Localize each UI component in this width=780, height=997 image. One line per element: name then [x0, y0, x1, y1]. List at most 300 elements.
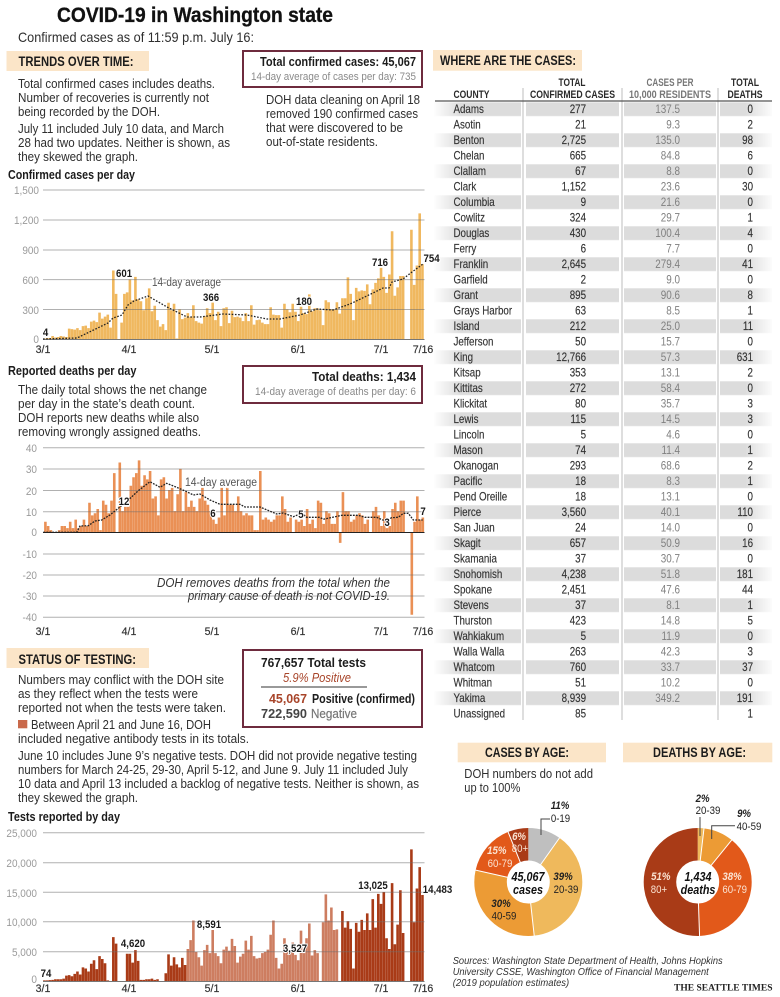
row: Stevens: Stevens [454, 599, 489, 612]
row: Jefferson: Jefferson [454, 336, 494, 349]
panel: deaths by age heading [623, 743, 772, 762]
row: Okanogan: Okanogan [454, 460, 499, 473]
row: Clark: 1,152 [562, 181, 586, 194]
row: Wahkiakum: Wahkiakum [454, 630, 504, 643]
x axis labels: 7/1 [374, 626, 388, 638]
row: Kitsap [454, 367, 753, 380]
bars: tests, standard days [44, 849, 422, 981]
row: Mason: 1 [748, 444, 753, 457]
text block: deaths note [18, 383, 207, 439]
row: Spokane: 47.6 [661, 584, 680, 597]
row: Skagit [454, 537, 753, 550]
row: Franklin [454, 258, 753, 271]
row: Lincoln: 5 [581, 429, 586, 442]
callout: test totals: 45,067 [269, 691, 307, 706]
row: Snohomish [454, 568, 753, 581]
wedge labels: 60-79 [722, 883, 747, 896]
row: Adams: 137.5 [655, 103, 680, 116]
value labels: 12 [119, 495, 129, 508]
text block: testing notes: June 10 includes June 9’s negative tests. DOH did not provide negative testing [18, 749, 417, 763]
row: Asotin: 21 [575, 119, 586, 132]
x axis labels: 3/1 [36, 344, 50, 356]
row: Kitsap: 2 [748, 367, 753, 380]
value labels: 14,483 [423, 883, 452, 896]
wedge labels: 40-59 [737, 820, 761, 833]
x axis labels: 3/1 [36, 626, 50, 638]
x axis labels [36, 344, 433, 356]
text block: sources: Sources: Washington State Department of Health, Johns Hopkins [453, 955, 723, 967]
row: Klickitat: Klickitat [454, 398, 487, 411]
callout: total confirmed cases [243, 51, 422, 87]
row: Cowlitz: Cowlitz [454, 212, 485, 225]
row: Ferry: 6 [581, 243, 586, 256]
x axis labels: 6/1 [291, 626, 305, 638]
row: Yakima [454, 692, 753, 705]
row: Lincoln [454, 429, 753, 442]
value labels: 3 [384, 516, 390, 529]
text block: trends notes: being recorded by the DOH. [18, 105, 160, 119]
text block: testing notes: included negative antibody tests in its totals. [18, 732, 249, 746]
wedge labels: 20-39 [554, 883, 578, 896]
row: Walla Walla: Walla Walla [454, 646, 504, 659]
row: Yakima: Yakima [454, 692, 485, 705]
row: Grays Harbor [454, 305, 753, 318]
text block: data cleaning note: out-of-state residents. [266, 135, 378, 149]
wedge labels: 38% [722, 870, 742, 883]
chart: reported deaths per day [8, 364, 433, 638]
panel: where are the cases heading [433, 50, 582, 71]
callout: test totals: 722,590 [261, 706, 307, 721]
panel: cases by age heading: CASES BY AGE: [485, 745, 569, 760]
text block: testing notes: Between April 21 and June 16, DOH [31, 718, 211, 732]
row: Wahkiakum: 0 [748, 630, 753, 643]
row: Skamania [454, 553, 753, 566]
donut center: 45,067 [511, 869, 546, 884]
row: Whitman [454, 677, 753, 690]
row: Clark [454, 181, 753, 194]
text block: sources: (2019 population estimates) [453, 977, 569, 989]
value labels [119, 477, 426, 529]
row: Spokane: 2,451 [562, 584, 586, 597]
value labels: 7 [420, 505, 426, 518]
text block: deaths note: DOH reports new deaths while also [18, 411, 199, 425]
value labels: 754 [423, 252, 440, 265]
table: cases by county [433, 77, 775, 721]
row: King: King [454, 351, 473, 364]
text block: data cleaning note: removed 190 confirmed cases [266, 107, 418, 121]
row: Whatcom: 33.7 [661, 661, 680, 674]
panel: testing heading: STATUS OF TESTING: [18, 652, 136, 667]
row: Okanogan: 293 [570, 460, 586, 473]
row: Stevens: 8.1 [666, 599, 680, 612]
chart: confirmed cases per day [8, 168, 440, 356]
callout: total confirmed cases: 14-day average of cases per day: 735 [251, 71, 416, 83]
wedge labels: 60-79 [488, 857, 512, 870]
row: Grant: 8 [748, 289, 753, 302]
row: Island: 212 [570, 320, 586, 333]
row: Clallam: 0 [748, 165, 753, 178]
row: Mason: 74 [575, 444, 586, 457]
row: Columbia: 9 [581, 196, 586, 209]
y axis labels: 900 [22, 244, 39, 257]
row: Whatcom: 37 [742, 661, 753, 674]
y axis labels [6, 827, 37, 986]
table header [454, 77, 762, 101]
text block: age note [464, 767, 593, 795]
text block: trends notes: 28 had two updates. Neither is shown, as [18, 136, 230, 150]
row: San Juan: 14.0 [661, 522, 680, 535]
row: Adams [454, 103, 753, 116]
row: Thurston: 5 [748, 615, 753, 628]
row: Pierce [454, 506, 753, 519]
row: Clark: 23.6 [661, 181, 680, 194]
y axis labels: 300 [22, 304, 39, 317]
donut center [511, 869, 546, 897]
text block: data cleaning note [266, 93, 420, 149]
callout: test totals: Positive (confirmed) [312, 692, 415, 706]
x axis labels: 4/1 [122, 344, 136, 356]
value labels: 14-day average [185, 477, 257, 489]
row: Lewis: 14.5 [661, 413, 680, 426]
row: Pierce: 3,560 [562, 506, 586, 519]
text block: testing notes: Numbers may conflict with the DOH site [18, 673, 224, 687]
row: Klickitat: 35.7 [661, 398, 680, 411]
row: Pierce: Pierce [454, 506, 481, 519]
y axis labels: 5,000 [12, 946, 37, 959]
row: Thurston: 423 [570, 615, 586, 628]
donut chart: cases by age [475, 799, 578, 936]
bars: daily deaths [45, 460, 423, 615]
row: Franklin: Franklin [454, 258, 488, 271]
row: Lewis: 115 [570, 413, 586, 426]
row: Ferry: 0 [748, 243, 753, 256]
callout: test totals: 5.9% Positive [283, 671, 351, 685]
row: Chelan: 6 [748, 150, 753, 163]
row: San Juan [454, 522, 753, 535]
row: Pacific: 8.3 [666, 475, 680, 488]
row: Lewis [454, 413, 753, 426]
row: San Juan: San Juan [454, 522, 495, 535]
row: Asotin: 2 [748, 119, 753, 132]
row: Klickitat: 80 [575, 398, 586, 411]
row: Douglas: 4 [748, 227, 753, 240]
panel: where are the cases heading: WHERE ARE THE CASES: [440, 53, 576, 68]
row: Stevens: 37 [575, 599, 586, 612]
x axis labels: 5/1 [205, 983, 219, 995]
chart heading: Confirmed cases per day [8, 168, 135, 182]
row: Whitman: 51 [575, 677, 586, 690]
y axis labels: -10 [23, 548, 37, 561]
panel: testing heading [6, 648, 149, 668]
wedge labels: 39% [553, 870, 573, 883]
wedge labels: 11% [551, 799, 570, 812]
row: Lincoln: Lincoln [454, 429, 484, 442]
row: King: 57.3 [661, 351, 680, 364]
x axis labels: 4/1 [122, 626, 136, 638]
donut center [681, 869, 716, 897]
row: Kitsap: 13.1 [661, 367, 680, 380]
row: Whitman: 0 [748, 677, 753, 690]
row: Walla Walla: 3 [748, 646, 753, 659]
title: COVID-19 in Washington state [57, 4, 333, 27]
row: Walla Walla [454, 646, 753, 659]
y axis labels: 20 [26, 485, 37, 498]
row: Columbia: 21.6 [661, 196, 680, 209]
row: Thurston: 14.8 [661, 615, 680, 628]
text block: data cleaning note: DOH data cleaning on April 18 [266, 93, 420, 107]
wedge labels: 2% [695, 792, 710, 805]
row: Benton [454, 134, 753, 147]
y axis labels: 0 [31, 973, 37, 986]
value labels: 601 [116, 267, 132, 280]
logo: The Seattle Times: THE SEATTLE TIMES [674, 984, 772, 994]
wedge labels: 51% [651, 870, 671, 883]
row: Columbia: Columbia [454, 196, 495, 209]
row: Skagit: 50.9 [661, 537, 680, 550]
row: Pacific: Pacific [454, 475, 483, 488]
y axis labels: 600 [22, 274, 39, 287]
line: 14-day average [43, 264, 423, 339]
callout: total deaths [243, 366, 422, 403]
text block: deaths note: removing wrongly assigned deaths. [18, 425, 201, 439]
value labels: 4,620 [121, 937, 145, 950]
row: Columbia: 0 [748, 196, 753, 209]
row: Whatcom: Whatcom [454, 661, 495, 674]
x axis labels: 4/1 [122, 983, 136, 995]
panel: cases by age heading [458, 743, 606, 762]
row: Grays Harbor: 8.5 [666, 305, 680, 318]
row: Benton: 98 [742, 134, 753, 147]
subtitle: Confirmed cases as of 11:59 p.m. July 16: [18, 29, 254, 45]
row: Pend Oreille: Pend Oreille [454, 491, 507, 504]
row: Thurston: Thurston [454, 615, 492, 628]
bars: tests including antibody [188, 894, 337, 981]
row: Mason: 11.4 [661, 444, 680, 457]
wedge labels: 80+ [512, 842, 528, 855]
row: Mason: Mason [454, 444, 483, 457]
row: Jefferson: 15.7 [661, 336, 680, 349]
table header: CONFIRMED CASES [530, 89, 615, 101]
text block: trends notes [18, 77, 230, 164]
row: Wahkiakum: 11.9 [661, 630, 680, 643]
x axis labels: 5/1 [205, 626, 219, 638]
y axis labels: 0 [31, 526, 37, 539]
row: Ferry [454, 243, 753, 256]
row: Douglas: Douglas [454, 227, 489, 240]
text block: trends notes: July 11 included July 10 data, and March [18, 122, 224, 136]
row: Wahkiakum [454, 630, 753, 643]
row: Clallam: 8.8 [666, 165, 680, 178]
row: Pend Oreille [454, 491, 753, 504]
row: Spokane: 44 [742, 584, 753, 597]
row: Stevens [454, 599, 753, 612]
row: Garfield: 0 [748, 274, 753, 287]
y axis labels: 10,000 [6, 916, 37, 929]
row: Thurston [454, 615, 753, 628]
chart heading: Reported deaths per day [8, 364, 137, 378]
row: Okanogan [454, 460, 753, 473]
text block: deaths note: per day in the state’s death count. [18, 397, 195, 411]
row: Unassigned: Unassigned [454, 708, 505, 721]
row: Kitsap: Kitsap [454, 367, 481, 380]
row: Grant: Grant [454, 289, 478, 302]
row: Garfield: 2 [581, 274, 586, 287]
wedge labels: 0-19 [551, 812, 570, 825]
row: Garfield: 9.0 [666, 274, 680, 287]
y axis labels: 1,500 [14, 184, 39, 197]
text block: testing notes: as they reflect when the tests were [18, 687, 198, 701]
x axis labels: 7/1 [374, 983, 388, 995]
text block: deaths note: The daily total shows the net change [18, 383, 207, 397]
row: Pacific: 1 [748, 475, 753, 488]
callout: test totals [243, 650, 422, 727]
row: Clallam: 67 [575, 165, 586, 178]
y axis labels: 20,000 [6, 857, 37, 870]
row: Skamania: 30.7 [661, 553, 680, 566]
row: Douglas [454, 227, 753, 240]
row: Okanogan: 2 [748, 460, 753, 473]
row: Columbia [454, 196, 753, 209]
y axis labels [23, 442, 37, 624]
callout: total deaths: 14-day average of deaths per day: 6 [255, 386, 416, 398]
value labels: 6 [210, 507, 216, 520]
x axis labels: 7/16 [413, 626, 433, 638]
row: Grays Harbor: 1 [748, 305, 753, 318]
text block: testing notes [18, 673, 419, 805]
row: Kittitas: 58.4 [661, 382, 680, 395]
row: Spokane [454, 584, 753, 597]
x axis labels: 7/16 [413, 983, 433, 995]
row: Clallam [454, 165, 753, 178]
row: Garfield: Garfield [454, 274, 488, 287]
x axis labels: 3/1 [36, 983, 50, 995]
row: Snohomish: Snohomish [454, 568, 502, 581]
text block: testing notes: they skewed the graph. [18, 791, 138, 805]
wedge labels: 30% [491, 897, 511, 910]
row: Cowlitz: 324 [570, 212, 586, 225]
donut center: deaths [681, 882, 716, 897]
annotation: removed deaths: DOH removes deaths from the total when the [157, 576, 390, 590]
value labels: 366 [203, 291, 219, 304]
panel: deaths by age heading: DEATHS BY AGE: [653, 745, 746, 760]
value labels [41, 879, 452, 980]
leader line [541, 819, 550, 835]
text block: age note: up to 100% [464, 781, 520, 795]
annotation: removed deaths: primary cause of death is not COVID-19. [187, 589, 390, 603]
y axis labels [14, 184, 39, 346]
row: Island [454, 320, 753, 333]
row: Benton: Benton [454, 134, 485, 147]
row: Snohomish: 4,238 [562, 568, 586, 581]
row: Clark: Clark [454, 181, 477, 194]
table header: TOTAL [731, 77, 759, 89]
row: Whatcom: 760 [570, 661, 586, 674]
row: Skamania: 0 [748, 553, 753, 566]
y axis labels: 10 [26, 506, 37, 519]
row: Snohomish: 51.8 [661, 568, 680, 581]
wedge labels: 40-59 [492, 910, 516, 923]
row: Skagit: 16 [742, 537, 753, 550]
row: Pacific: 18 [575, 475, 586, 488]
text block: trends notes: they skewed the graph. [18, 150, 138, 164]
wedge labels: 20-39 [696, 804, 720, 817]
y axis labels: -40 [23, 611, 37, 624]
row: Jefferson: 50 [575, 336, 586, 349]
row: Kitsap: 353 [570, 367, 586, 380]
wedge labels [487, 799, 578, 923]
row: Okanogan: 68.6 [661, 460, 680, 473]
row: Unassigned: 1 [748, 708, 753, 721]
row: King: 12,766 [556, 351, 586, 364]
y axis labels: 30 [26, 463, 37, 476]
callout: total confirmed cases: Total confirmed cases: 45,067 [260, 55, 416, 69]
callout: test totals: 767,657 Total tests [261, 656, 366, 670]
row: Whitman: Whitman [454, 677, 492, 690]
row: Jefferson [454, 336, 753, 349]
text block: testing notes: reported not when the tests were taken. [18, 701, 226, 715]
value labels: 13,025 [358, 879, 388, 892]
row: Adams: 0 [748, 103, 753, 116]
row: Lewis: Lewis [454, 413, 478, 426]
line: 14-day average [43, 482, 423, 532]
row: Lewis: 3 [748, 413, 753, 426]
value labels [43, 252, 440, 339]
row: Chelan [454, 150, 753, 163]
row: Pend Oreille: 18 [575, 491, 586, 504]
y axis labels: -30 [23, 590, 37, 603]
panel: trends heading [6, 51, 149, 71]
value labels: 4 [43, 326, 48, 339]
row: Unassigned: 85 [575, 708, 586, 721]
row: Pend Oreille: 0 [748, 491, 753, 504]
row: Adams: 277 [570, 103, 586, 116]
row: Cowlitz: 29.7 [661, 212, 680, 225]
wedge labels [651, 792, 761, 896]
row: Klickitat: 3 [748, 398, 753, 411]
row: Franklin: 41 [742, 258, 753, 271]
row: Spokane: Spokane [454, 584, 492, 597]
row: San Juan: 0 [748, 522, 753, 535]
row: Franklin: 2,645 [562, 258, 586, 271]
y axis labels: 25,000 [6, 827, 37, 840]
row: Skamania: 37 [575, 553, 586, 566]
wedge labels: 15% [487, 844, 507, 857]
row: Island: 11 [743, 320, 753, 333]
row: Mason [454, 444, 753, 457]
wedge labels: 9% [737, 807, 752, 820]
value labels: 74 [41, 967, 51, 980]
chart heading: Tests reported by day [8, 810, 120, 824]
donut chart: deaths by age [651, 792, 761, 936]
row: Ferry: 7.7 [666, 243, 680, 256]
row: Snohomish: 181 [737, 568, 753, 581]
text block: testing notes: numbers for March 24-25, 29-30, April 5-12, and June 9. July 11 included July [18, 763, 409, 777]
value labels: 716 [372, 256, 388, 269]
row: Skamania: Skamania [454, 553, 497, 566]
table header: CASES PER [646, 77, 694, 89]
table header: TOTAL [558, 77, 586, 89]
row: Lincoln: 4.6 [666, 429, 680, 442]
row: Lincoln: 0 [748, 429, 753, 442]
row: Yakima: 191 [737, 692, 753, 705]
row: Kittitas [454, 382, 753, 395]
y axis labels: 0 [33, 333, 39, 346]
row: Ferry: Ferry [454, 243, 477, 256]
row: Grays Harbor: Grays Harbor [454, 305, 512, 318]
row: Asotin: 9.3 [666, 119, 680, 132]
row: Chelan: Chelan [454, 150, 484, 163]
callout: total deaths: Total deaths: 1,434 [312, 369, 417, 384]
